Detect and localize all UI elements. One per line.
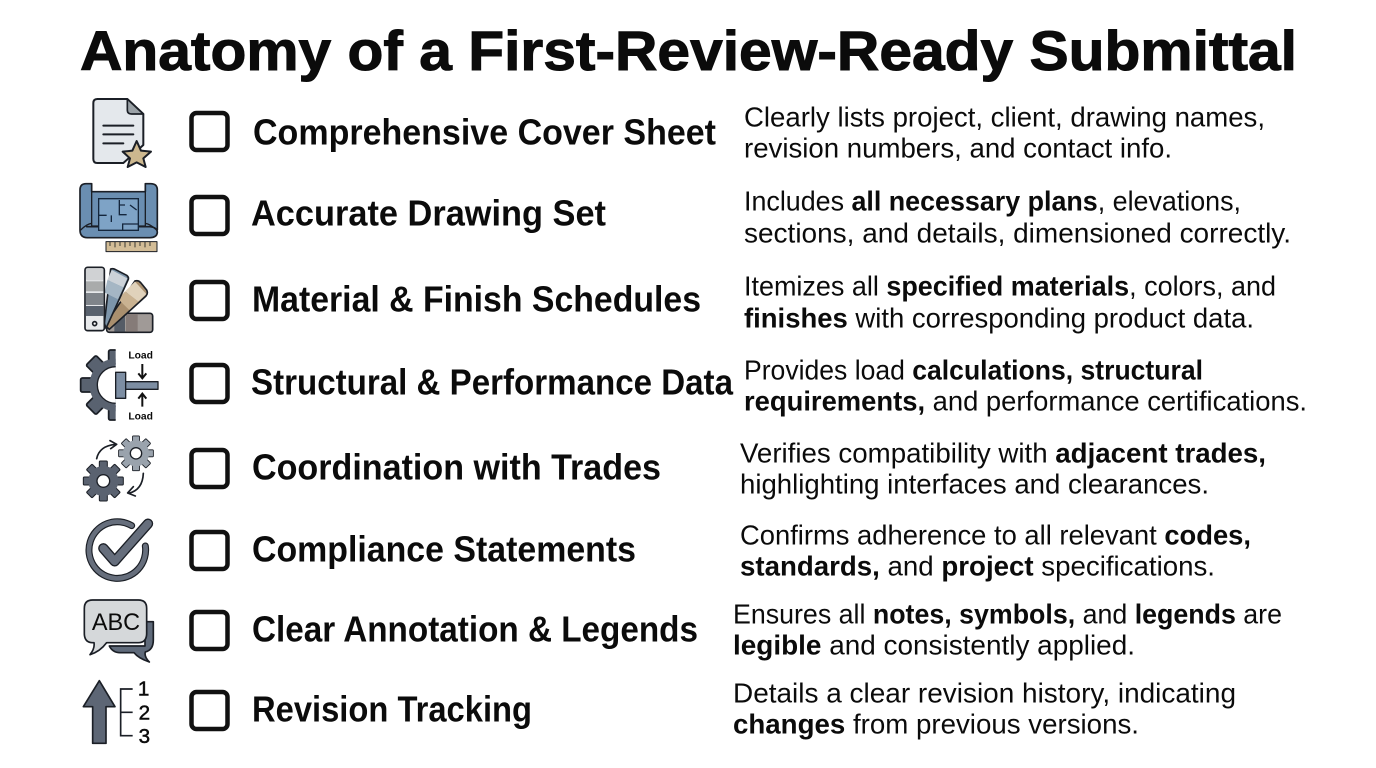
description: Itemizes all specified materials, colors, and	[744, 270, 1276, 301]
row: material and finish schedules	[85, 267, 1276, 333]
description	[744, 101, 1265, 163]
description	[744, 270, 1276, 333]
description	[740, 437, 1266, 499]
icon: colour swatch fan	[85, 267, 153, 332]
description: Includes all necessary plans, elevations,	[744, 185, 1241, 216]
icon: two gears with arrows	[83, 436, 153, 501]
icon: blueprint and ruler	[80, 184, 157, 252]
heading: Coordination with Trades	[252, 446, 661, 487]
description: finishes with corresponding product data.	[744, 302, 1254, 333]
icon: document with star	[93, 99, 151, 167]
icon: ABC speech bubbles: ABC	[92, 609, 140, 636]
row: coordination with trades	[83, 436, 1266, 501]
row: clear annotation and legends	[84, 598, 1282, 662]
icon: gear with loaded beam: Load	[128, 411, 153, 422]
description: sections, and details, dimensioned correctly.	[744, 217, 1291, 248]
heading: Structural & Performance Data	[251, 361, 734, 402]
row: accurate drawing set	[80, 184, 1291, 252]
checkbox	[192, 282, 228, 319]
heading: Revision Tracking	[252, 688, 532, 729]
heading: Clear Annotation & Legends	[252, 608, 698, 649]
row: revision tracking	[83, 677, 1236, 748]
icon: up arrow with numbered bracket: 3	[139, 725, 150, 748]
description	[733, 677, 1236, 739]
icon: gear with loaded beam: Load	[128, 351, 153, 362]
heading: Material & Finish Schedules	[252, 278, 701, 319]
description: requirements, and performance certifications.	[744, 385, 1307, 416]
checkbox	[192, 692, 228, 729]
row: compliance statements	[89, 519, 1251, 581]
checkbox	[192, 113, 228, 150]
icon: up arrow with numbered bracket: 2	[139, 701, 150, 724]
description	[733, 598, 1282, 660]
icon: ABC speech bubbles	[84, 600, 153, 662]
description	[740, 519, 1251, 581]
description: changes from previous versions.	[733, 708, 1139, 739]
checkbox	[192, 532, 228, 569]
description: Provides load calculations, structural	[744, 354, 1203, 385]
title: Anatomy of a First-Review-Ready Submittal	[80, 19, 1297, 82]
checkbox	[192, 450, 228, 487]
description	[744, 354, 1307, 416]
heading: Compliance Statements	[252, 528, 636, 569]
description: Clearly lists project, client, drawing names,	[744, 101, 1265, 132]
description: Verifies compatibility with adjacent trades,	[740, 437, 1266, 468]
checkbox	[192, 197, 228, 234]
description: Details a clear revision history, indicating	[733, 677, 1236, 708]
description: legible and consistently applied.	[733, 629, 1135, 660]
icon: gear with loaded beam	[81, 350, 158, 422]
checkbox	[192, 612, 228, 649]
heading: Accurate Drawing Set	[251, 192, 606, 233]
description: standards, and project specifications.	[740, 550, 1215, 581]
row: comprehensive cover sheet	[93, 99, 1265, 167]
heading: Comprehensive Cover Sheet	[253, 111, 716, 152]
description: highlighting interfaces and clearances.	[740, 468, 1209, 499]
icon: up arrow with numbered bracket	[83, 677, 150, 748]
description: Ensures all notes, symbols, and legends are	[733, 598, 1282, 629]
description	[744, 185, 1291, 248]
description: Confirms adherence to all relevant codes,	[740, 519, 1251, 550]
description: revision numbers, and contact info.	[744, 132, 1172, 163]
icon: check mark in circle	[89, 522, 148, 578]
checkbox	[192, 365, 228, 402]
icon: up arrow with numbered bracket: 1	[138, 677, 149, 700]
row: structural and performance data	[81, 350, 1307, 422]
